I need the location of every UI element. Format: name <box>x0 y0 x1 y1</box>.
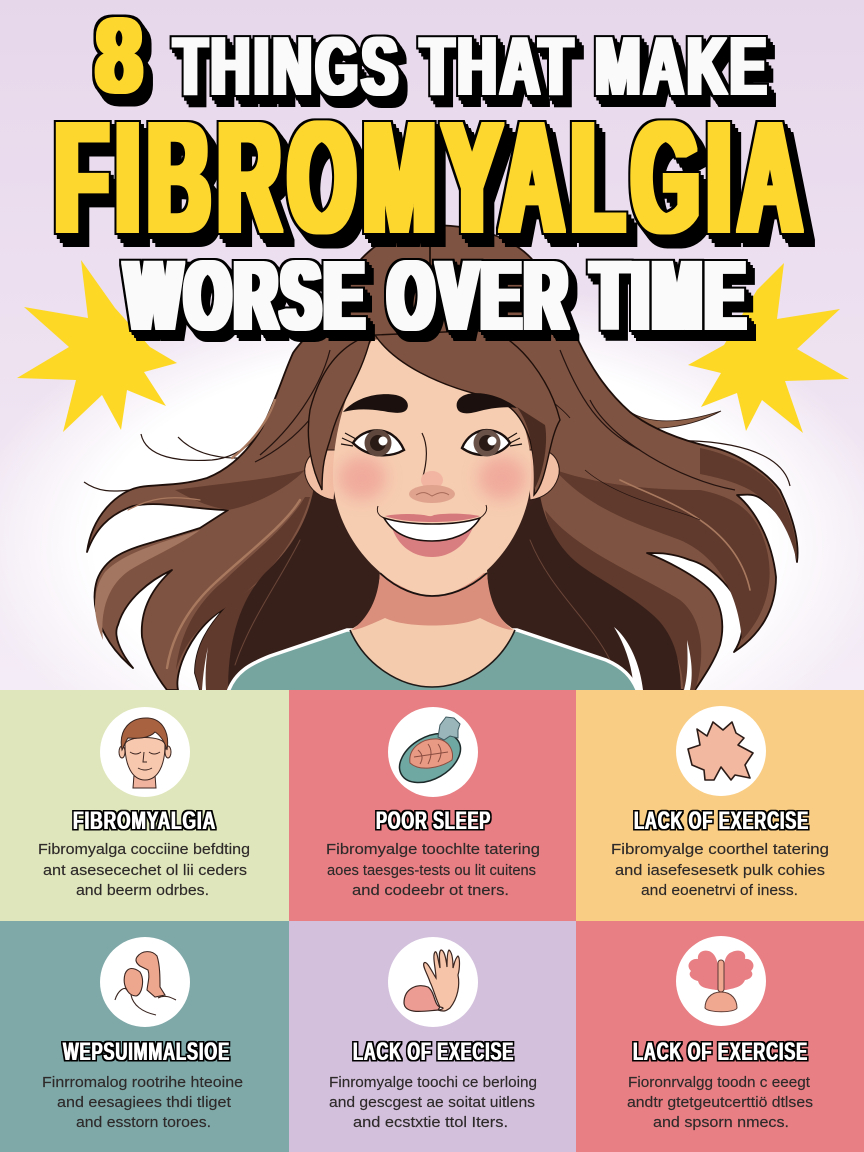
heading: POOR SLEEP <box>376 807 491 835</box>
text block: aoes taesges-tests ou lit cuitens <box>327 862 536 879</box>
side-swept bangs <box>375 330 560 495</box>
panel: lack of exercise (bottom right) <box>576 921 864 1152</box>
neck shadow <box>352 573 513 630</box>
neck <box>350 565 515 687</box>
icon: hands at face <box>115 952 176 1015</box>
text block <box>38 841 250 899</box>
hair: dark strand lines <box>255 350 735 520</box>
icon: peach leaf shape <box>688 722 753 780</box>
text block: and iasefesesetk pulk cohies <box>615 862 825 879</box>
shirt <box>228 630 638 692</box>
loose hair wisps <box>84 434 790 491</box>
heading: WEPSUIMMALSIOE <box>63 1038 230 1066</box>
panel: wepsuimmalsioe <box>0 921 289 1152</box>
icon: raised hand with mound <box>404 950 460 1011</box>
text block: and eesagiees thdi tliget <box>57 1094 232 1111</box>
hair: right mass <box>430 225 798 690</box>
icon: pink flower with figure <box>689 951 753 1012</box>
heading: FIBROMYALGIA <box>73 807 216 835</box>
hair: mid-dark strands <box>175 448 797 690</box>
hair: wisp right <box>630 411 721 428</box>
left ear <box>305 450 338 500</box>
text block: and spsorn nmecs. <box>653 1114 789 1131</box>
hair: highlights <box>128 400 750 668</box>
nose <box>409 433 455 503</box>
text block <box>326 841 540 899</box>
icon: right yellow starburst <box>688 263 849 433</box>
panel: poor sleep <box>289 690 576 921</box>
text block: and ecstxtie ttol Iters. <box>353 1114 508 1131</box>
text block: Finromyalge toochi ce berloing <box>329 1074 537 1091</box>
icon: brain on teal oval <box>391 717 469 793</box>
text block: Fibromyalga cocciine befdting <box>38 841 250 858</box>
panel: fibromyalgia <box>0 690 289 921</box>
left eye <box>341 430 404 456</box>
hair over forehead <box>308 335 370 490</box>
hair: left mass <box>87 225 440 690</box>
collar <box>350 630 515 687</box>
icon: left yellow starburst <box>17 260 177 432</box>
text block: Fibromyalge coorthel tatering <box>611 841 829 858</box>
title number 8: 8 <box>96 0 142 115</box>
icon: man face <box>119 718 171 788</box>
text block: and gescgest ae soitat uitlens <box>329 1094 535 1111</box>
panel: lack of exercise (top right) <box>576 690 864 921</box>
heading: LACK OF EXECISE <box>353 1038 514 1066</box>
text block: and codeebr ot tners. <box>352 882 509 899</box>
blush <box>338 456 526 500</box>
right eyebrow <box>457 393 517 413</box>
text block <box>329 1074 537 1131</box>
white gaps between hair locks <box>202 627 692 690</box>
text block <box>611 841 829 899</box>
left eyebrow <box>343 394 408 413</box>
face <box>333 335 531 596</box>
text block: and esstorn toroes. <box>76 1114 211 1131</box>
text block: Fioronrvalgg toodn c eeegt <box>628 1074 811 1091</box>
illustration: smiling woman with long brown hair <box>84 225 798 692</box>
text block: and eoenetrvi of iness. <box>641 882 798 899</box>
panel: lack of execise <box>289 921 576 1152</box>
text block: Finrromalog rootrihe hteoine <box>42 1074 243 1091</box>
text block <box>42 1074 243 1131</box>
right ear <box>526 450 559 500</box>
right eye <box>462 430 522 456</box>
hair: lighter outer band on lower left lock <box>95 530 200 640</box>
text block: ant asesecechet ol lii ceders <box>43 862 247 879</box>
title <box>55 0 809 350</box>
hair: darkest inner layer <box>228 480 681 690</box>
background <box>0 0 864 690</box>
mouth <box>377 505 487 557</box>
text block: andtr gtetgeutcerttiö dtlses <box>627 1094 813 1111</box>
text block <box>627 1074 813 1131</box>
text block: and beerm odrbes. <box>76 882 209 899</box>
text block: Fibromyalge toochlte tatering <box>326 841 540 858</box>
